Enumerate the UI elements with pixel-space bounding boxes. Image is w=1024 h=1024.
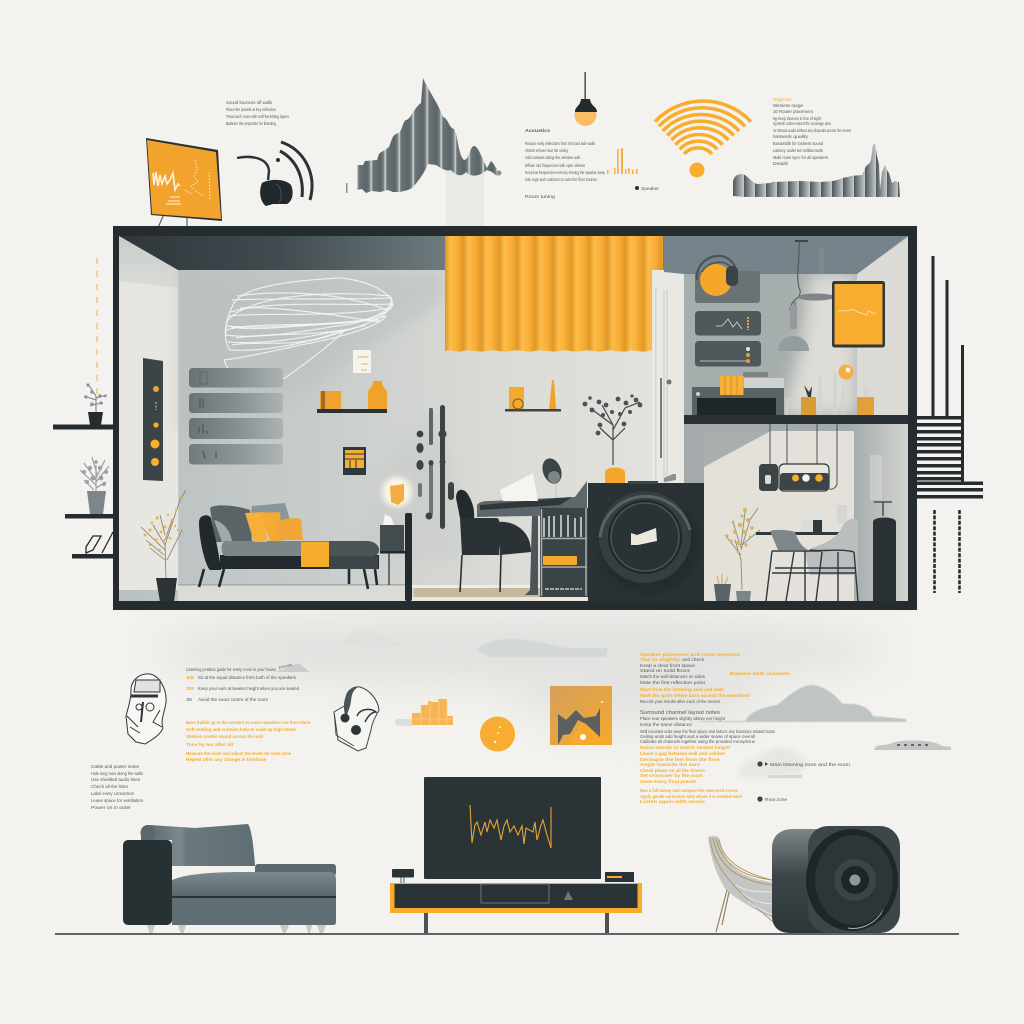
text block: lower left orange: Repeat after any change in furniture: [186, 757, 266, 762]
white door: [652, 270, 684, 484]
text block: lower right: Speaker placement and room response: [640, 652, 741, 657]
legend items: Rear zone: [765, 797, 787, 802]
text block: lower right: Leave a gap between wall and cabinet: [640, 751, 725, 756]
text block: lower left orange: [186, 720, 310, 762]
plant on cabinet: [583, 394, 642, 483]
room background walls: [119, 236, 908, 601]
text block: lower left list: Keep your ears at tweeter height when you are seated: [198, 686, 299, 691]
wall shelf with book and cone: [505, 380, 561, 412]
text block: lower right: Raise stands to match seated height: [640, 745, 731, 750]
text block: top centre: Absorb echoes near the ceiling: [525, 148, 568, 153]
text block: far left: [91, 764, 144, 810]
tablet with chart: [146, 138, 222, 230]
text block: lower right: Balance both channels: [730, 671, 791, 676]
gold mountain chart card: [550, 686, 612, 745]
text block: top left: Sound bounces off walls: [226, 100, 273, 105]
lower right room: [684, 424, 908, 601]
wall control strip: [143, 358, 163, 481]
text block: lower right: [640, 652, 791, 804]
text block: lower right: Calibrate all channels together using the provided microphone: [640, 739, 755, 744]
text block: lower left orange: Soft seating and curtains help to soak up high tones: [186, 727, 296, 732]
dining table and chairs: [756, 505, 858, 601]
text block: lower right: Keep the same distance: [640, 722, 692, 727]
icon: head with headphones: [334, 687, 379, 751]
text block: far left: Label every connection: [91, 791, 134, 796]
text block: lower right: Keep a clear front space: [640, 663, 695, 668]
wall equaliser panels: [695, 311, 761, 366]
text block: top centre: Reduce early reflections from the hard side walls: [525, 141, 595, 146]
small orange bar chart: lower: [395, 699, 453, 726]
wall note card: [353, 350, 371, 373]
floor line: [55, 933, 959, 935]
text block: top centre: Acoustics: [525, 128, 550, 133]
frame: [113, 226, 917, 610]
living room sofa: [199, 503, 379, 589]
wall panel stack: [189, 368, 283, 464]
text block: top right: Wireless range: [773, 103, 803, 108]
ceiling right overlay: [664, 236, 908, 274]
text block: lower left list: Listening position guide for every room in your house: [186, 667, 276, 672]
waveform chart: centre: [346, 78, 502, 193]
text block: lower left list: [186, 667, 299, 702]
text block: lower right: Note the first reflection point: [640, 680, 706, 685]
text block: lower left list: 20: [186, 686, 195, 691]
curtain: [445, 236, 663, 352]
text block: top right: 5g Keep devices in line of sight: [773, 116, 822, 121]
text block: lower right: Listen again with music: [640, 799, 706, 804]
ceiling: [119, 236, 908, 274]
orange circle dot: [480, 716, 515, 752]
large speaker: [772, 826, 900, 933]
text block: top centre: [525, 128, 659, 199]
text block: lower right: Run a full sweep and compare the measured curves: [640, 788, 738, 793]
text block: lower right: Surround channel layout notes: [640, 710, 721, 716]
text block: lower right: Toe in slightly: [640, 657, 681, 662]
text block: lower left orange: Measure the room and adjust the levels for each zone: [186, 751, 291, 756]
text block: top right: 4x Stream audio without any dropouts across the rooms: [773, 128, 851, 133]
faded landscape: [738, 748, 810, 778]
text block: lower right: Apply gentle correction only where it is needed most: [640, 794, 742, 799]
mid floor beam: [684, 415, 908, 424]
text block: lower right: Check phase on all the drivers: [640, 768, 705, 773]
text block: lower right: Ceiling units add height and a wider sense of space overall: [640, 734, 755, 739]
floor: [178, 584, 588, 601]
small grey triangle: [275, 663, 310, 672]
text block: top centre: Add curtains along the window wall: [525, 155, 580, 160]
text block: lower right: Record your results after each of the moves: [640, 699, 721, 704]
text block: top centre: Use rugs and cushions to calm the floor bounce: [525, 177, 597, 182]
text block: far left: Leave space for ventilation: [91, 798, 143, 803]
console with box: [692, 372, 784, 415]
floating shelf with book and vase: [317, 381, 387, 413]
text block: top right: 10 Router placement: [773, 109, 814, 114]
text block: lower right: Decouple the feet from the floor: [640, 757, 720, 762]
text block: far left: Cable and power notes: [91, 764, 140, 769]
text block: top left: [226, 100, 290, 126]
icon: headset with signal arcs: [237, 142, 312, 206]
soft background wash: [150, 170, 890, 730]
waveform chart: right skyline: [733, 143, 900, 197]
hanging audio unit: [759, 424, 837, 491]
left exterior shelves with plants: [53, 258, 113, 558]
scribble lines: [224, 278, 393, 385]
text block: top right: Network quality: [773, 134, 809, 139]
dining plant and pots: [714, 508, 760, 601]
text block: top right: Signal: [773, 97, 791, 102]
text block: lower right: Save every final preset: [640, 779, 697, 784]
pendant lamp fixtures: [778, 241, 835, 351]
text block: top right: Bandwidth for lossless sound: [773, 141, 823, 146]
text block: far left: Power on in order: [91, 805, 132, 810]
small cloud with dots: [874, 740, 951, 750]
text block: lower right: Place rear speakers slightly above ear height: [640, 716, 726, 721]
desk with laptop and chair: [456, 456, 587, 595]
wall acoustic sliders: [416, 405, 454, 529]
text block: top left: Place the panels at key reflection: [226, 107, 276, 112]
text block: top right: Latency under ten milliseconds: [773, 148, 824, 153]
text block: lower left list: 30: [186, 697, 193, 702]
text block: lower left orange: Bass builds up in the corners so move speakers out from them: [186, 720, 310, 725]
clouds: [336, 630, 608, 657]
plant left in room: [141, 490, 186, 602]
house cross-section: [113, 226, 917, 610]
bookshelf: [540, 508, 588, 597]
text block: lower right: Stand on solid floors: [640, 668, 691, 673]
text block: top right: Multi room sync for all speakers: [773, 155, 829, 160]
room divider post: [405, 513, 412, 601]
text block: far left: Check all the links: [91, 784, 129, 789]
icon: pendant lamp: [574, 72, 597, 126]
legend items: [757, 761, 850, 802]
text block: top left: Treat each room with soft furnishing layers: [226, 114, 290, 119]
lounge chair: [708, 836, 785, 932]
text block: top right: 2g Mesh nodes extend the coverage area: [773, 121, 831, 126]
speaker cabinet: [588, 481, 704, 601]
text block: lower left orange: Tune by ear after all: [186, 742, 233, 747]
text block: lower right: Start from the listening seat and walk: [640, 687, 724, 692]
text block: lower right: Angle towards the ears: [640, 762, 701, 767]
lounge sofa: [123, 824, 336, 933]
text block: lower right: Wall mounted units save the floor space and reduce any boundary related boom: [640, 729, 775, 734]
text block: lower left orange: Shelves scatter sound across the wall: [186, 734, 263, 739]
small grey triangle: peak: [279, 663, 293, 669]
text block: top centre: Room tuning: [525, 194, 556, 199]
text block: lower left list: 10: [186, 675, 195, 680]
text block: top right: [773, 97, 851, 166]
icon: wifi signal fan: [655, 101, 751, 178]
large grey cloud: [700, 685, 906, 722]
text block: lower left list: Avoid the exact centre of the room: [198, 697, 268, 702]
small wall poster: [343, 447, 366, 475]
text block: top centre: Speaker: [641, 186, 659, 191]
upper right room wall: [684, 238, 908, 415]
orange tablet on wall: [832, 281, 885, 348]
small orange bar chart: [607, 148, 638, 174]
text block: lower right: and check: [682, 657, 705, 662]
text block: far left: Use shielded audio lines: [91, 777, 141, 782]
side table with tissue: [380, 514, 405, 585]
text block: lower right: Mark the spots where bass sounds the smoothest: [640, 693, 750, 698]
text block: top left: Balance the response for listening: [226, 121, 276, 126]
icon: head sketch with headband: [126, 674, 166, 744]
text block: top centre: Keep low frequencies even by moving the speaker away: [525, 170, 605, 175]
text block: lower right: Match the wall distances on sides: [640, 674, 706, 679]
potted plant and vases on shelf: [787, 364, 874, 415]
legend items: Main listening zone and the room: [770, 762, 850, 767]
text block: lower right: Set crossover by the room: [640, 773, 703, 778]
right exterior bar graphic: [917, 256, 983, 593]
television with waveform: [424, 777, 601, 879]
wall lamp glow: [382, 477, 412, 507]
tall floor lamp column: [873, 502, 896, 601]
text block: lower left list: Sit at the equal distance from both of the speakers: [198, 675, 297, 680]
text block: far left: Hide long runs along the walls: [91, 771, 144, 776]
wall headphone panel: [695, 256, 760, 303]
media console: [390, 869, 642, 934]
text block: top right: Details: [773, 161, 789, 166]
text block: top centre: Diffuse mid frequencies with open shelves: [525, 163, 585, 168]
